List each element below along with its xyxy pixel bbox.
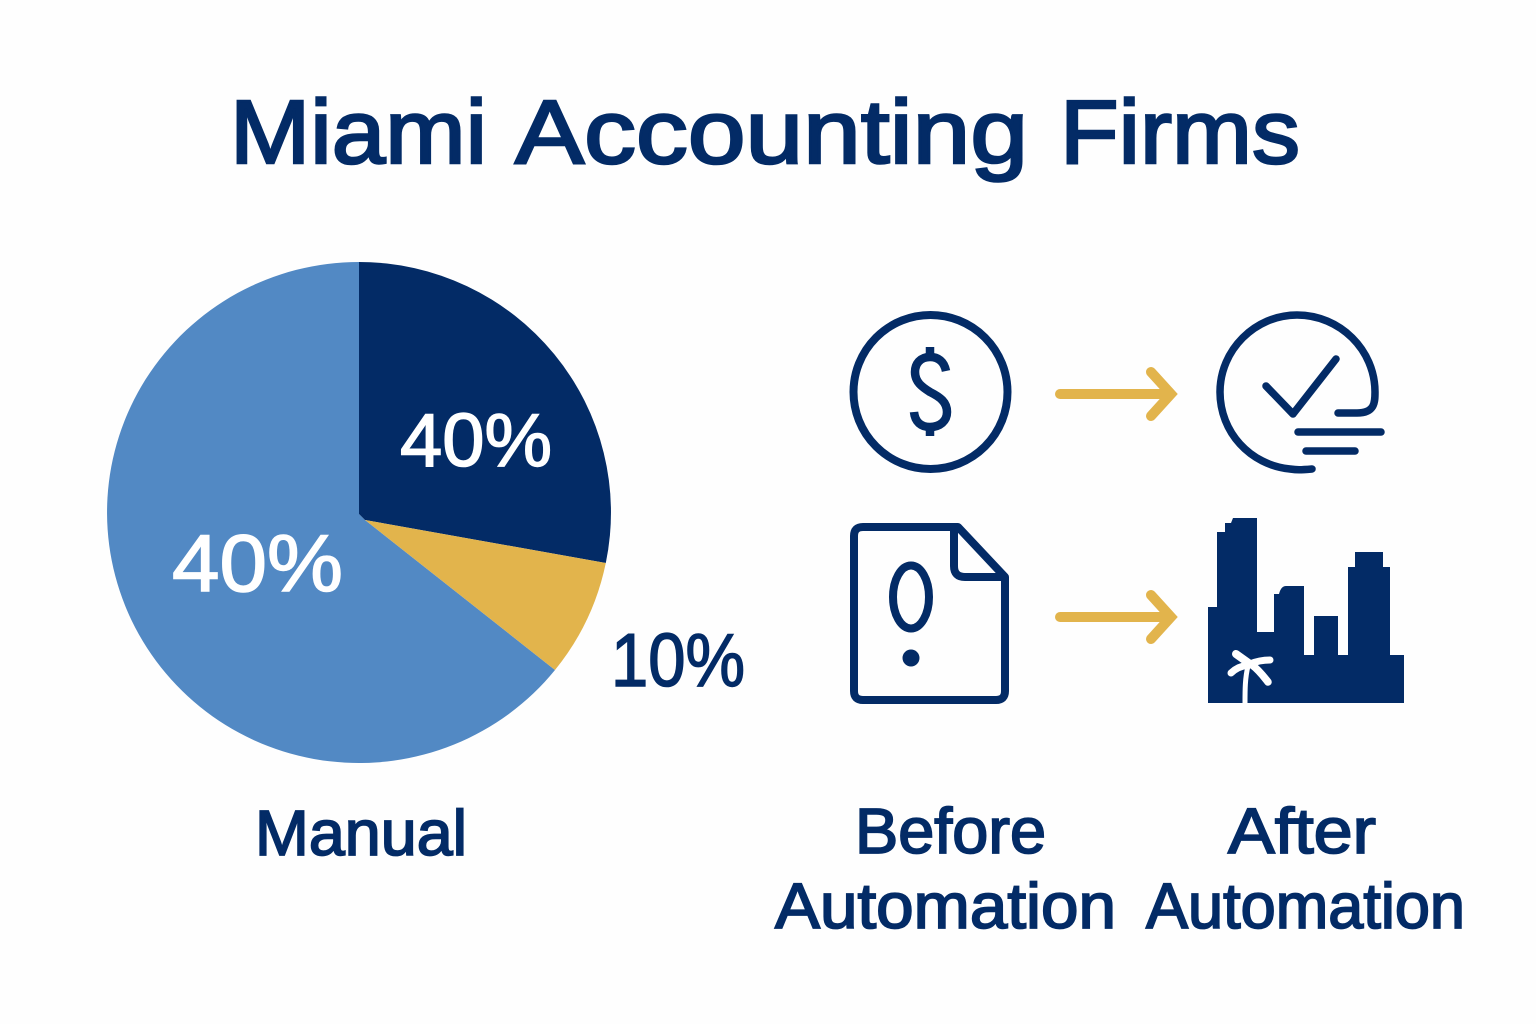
arrow: top xyxy=(1060,372,1171,416)
icon: city skyline with palm tree xyxy=(1208,518,1404,703)
label: Before Automation: Automation xyxy=(775,870,1116,942)
palm tree xyxy=(1231,654,1270,703)
label: After Automation: Automation xyxy=(1146,870,1465,942)
pie slice: light blue 40% xyxy=(107,262,555,763)
label: gold slice 10%: 10% xyxy=(611,618,745,702)
icon: document with exclamation xyxy=(854,527,1005,700)
label: navy slice 40%: 40% xyxy=(400,398,552,482)
arrow: bottom xyxy=(1060,595,1171,639)
title: Firms xyxy=(1060,83,1300,183)
pie slice: navy 40% xyxy=(359,262,611,563)
label: Before Automation xyxy=(775,795,1116,942)
label: After Automation xyxy=(1146,795,1465,942)
icon: checkmark circle with lines xyxy=(1220,315,1381,470)
pie chart xyxy=(107,262,611,763)
pie slice: gold 10% xyxy=(365,520,606,670)
title: Accounting xyxy=(515,83,1028,183)
icon: dollar coin xyxy=(854,315,1008,469)
title: Miami xyxy=(230,83,487,183)
label: blue slice 40%: 40% xyxy=(172,519,343,609)
label: Before Automation: Before xyxy=(855,795,1046,867)
label: After Automation: After xyxy=(1228,795,1376,867)
title xyxy=(230,83,1300,183)
label: Manual: Manual xyxy=(255,797,467,869)
